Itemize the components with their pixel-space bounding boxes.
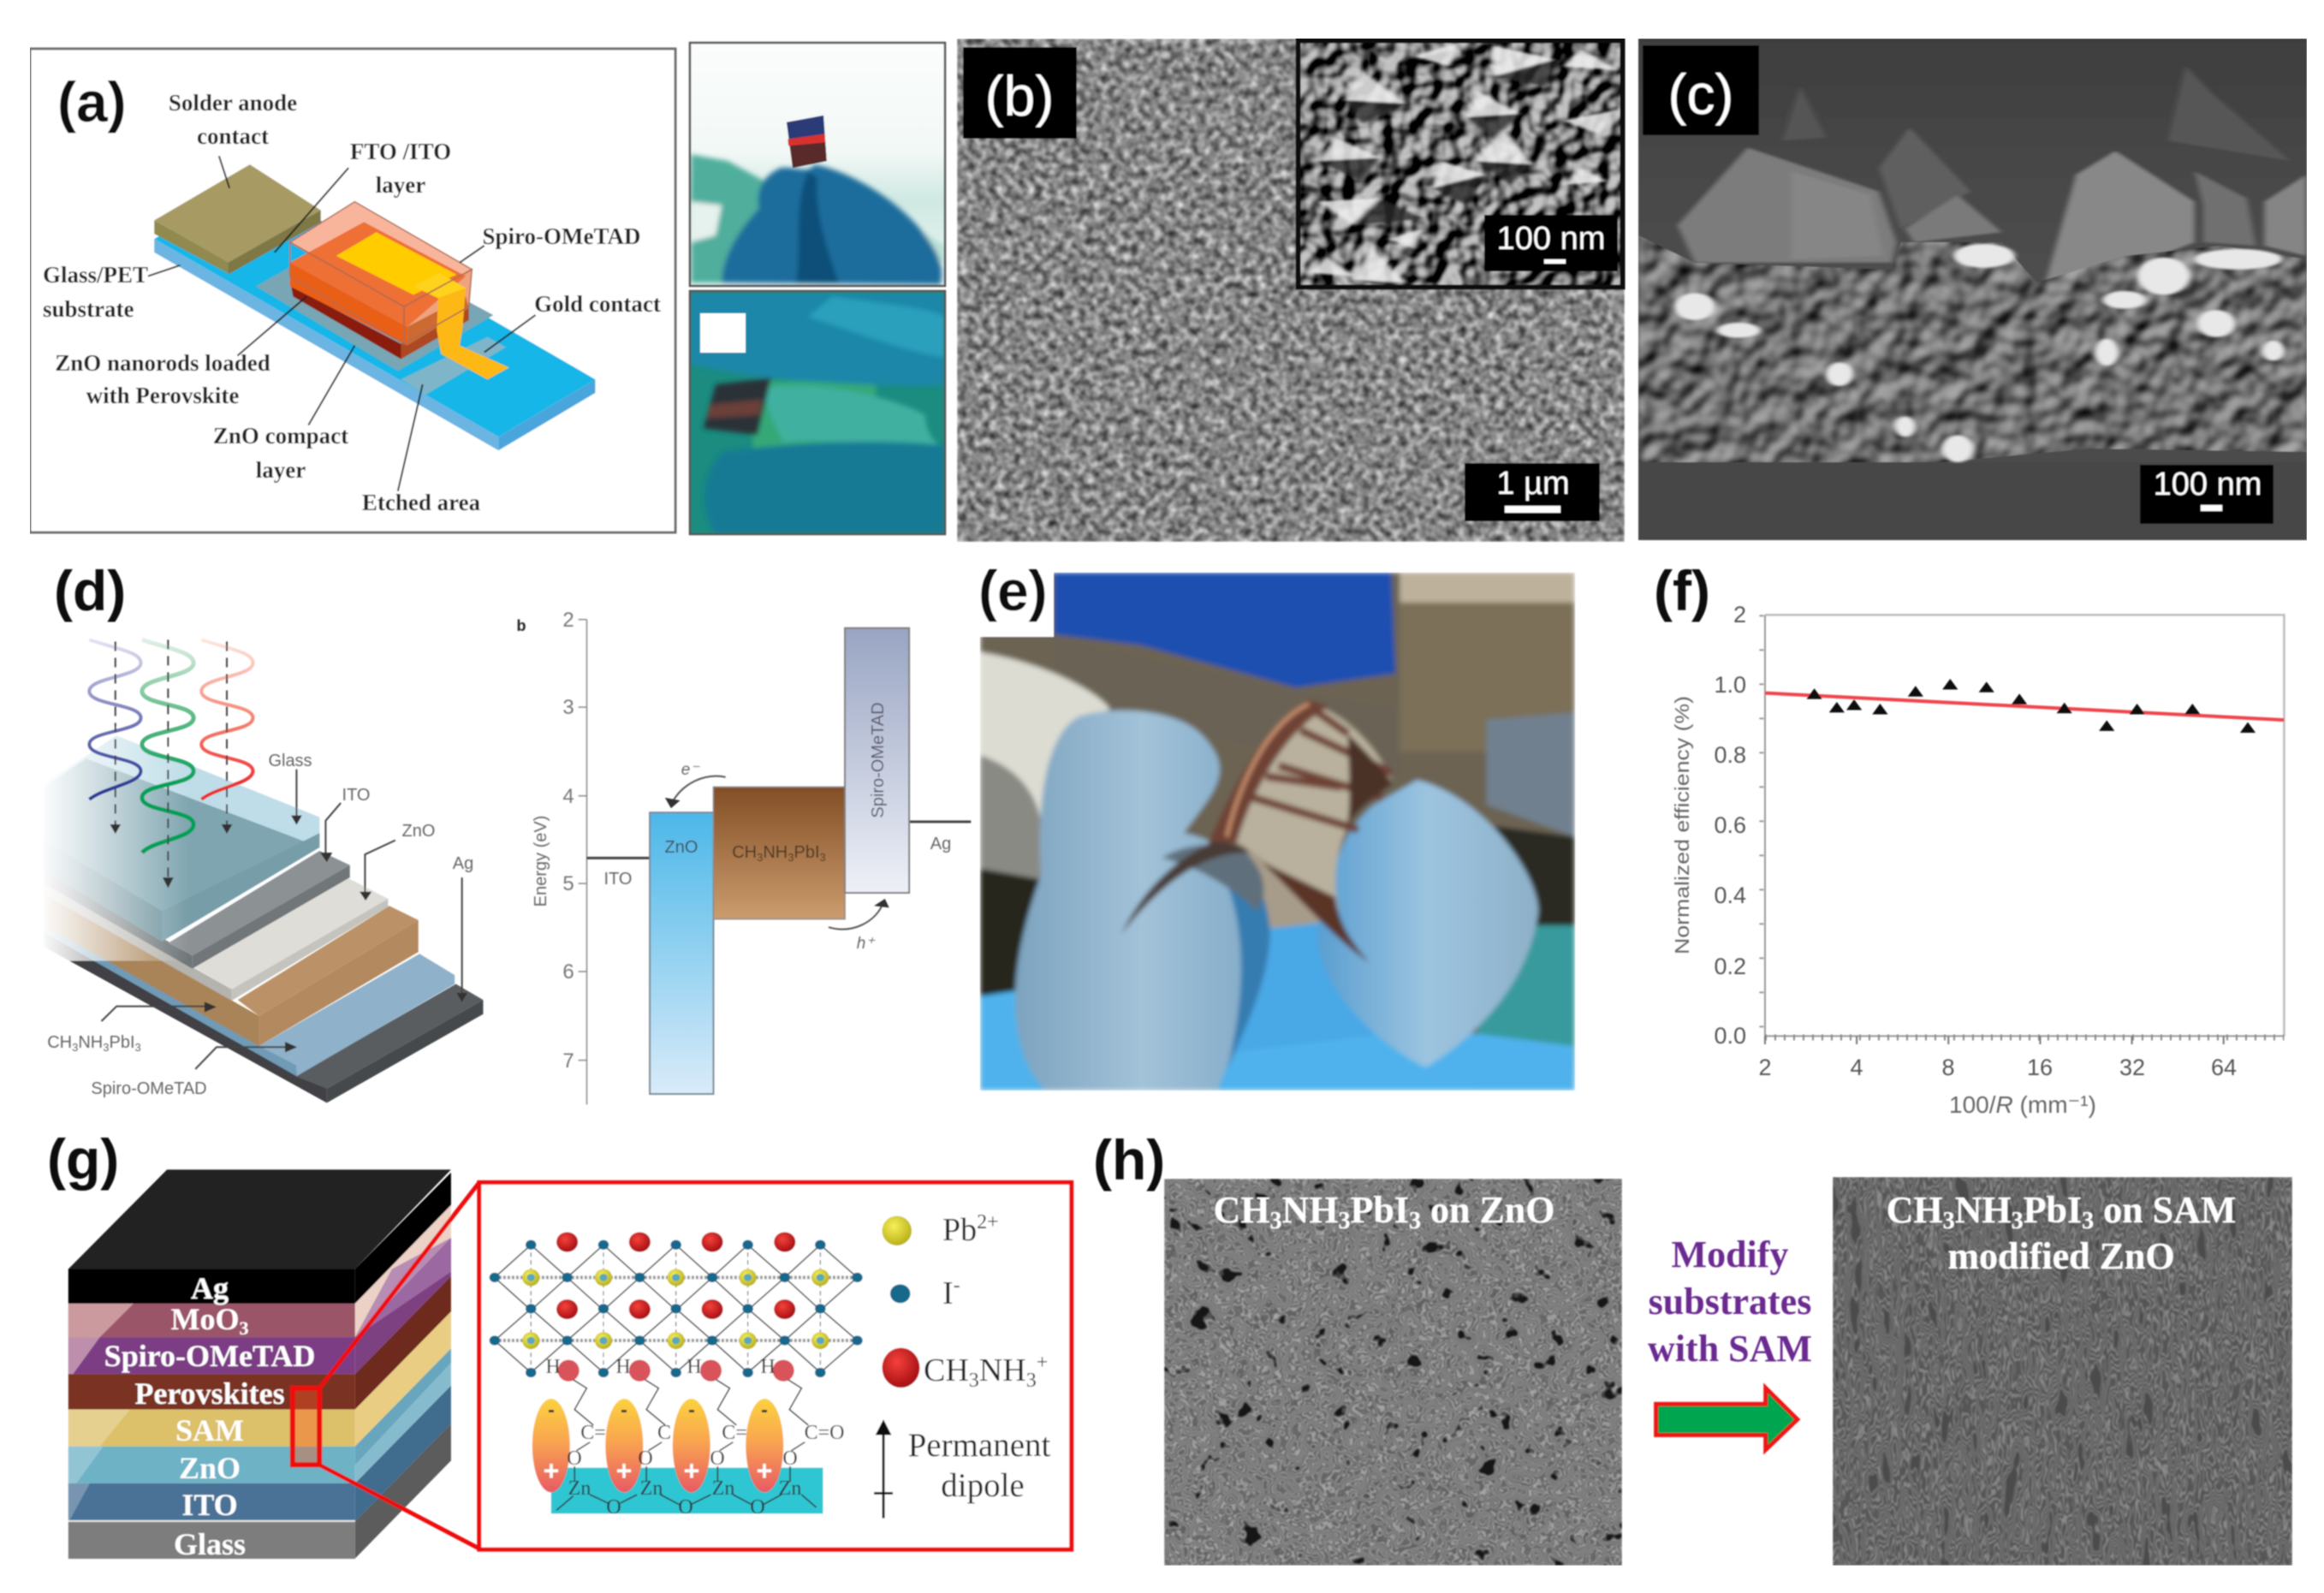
x-axis title: 100/R (mm⁻¹) [1949, 1091, 2096, 1118]
bright grains [1673, 244, 2285, 462]
scale bar 100 nm: 100 nm [1497, 221, 1605, 257]
layer label: Perovskites: Perovskites [134, 1376, 285, 1411]
caption: on ZnO: on ZnO [1421, 1189, 1554, 1231]
energy axis tick labels: 6 [562, 960, 574, 984]
y-axis tick labels: 0.8 [1714, 742, 1746, 768]
SEM: perovskite on ZnO [1164, 1179, 1622, 1566]
chain atoms: Zn [712, 1477, 734, 1500]
label: Spiro-OMeTAD: Spiro-OMeTAD [91, 1079, 207, 1098]
plot frame, ticks and data [1762, 615, 2284, 1044]
substrate [1638, 462, 2307, 540]
label: perovskite: 3 [820, 851, 826, 864]
y-axis tick labels: 0.6 [1714, 812, 1746, 838]
x-axis tick labels: 32 [2119, 1055, 2145, 1080]
x-axis tick labels [1758, 1055, 2237, 1080]
y-axis title: Normalized efficiency (%) [1671, 696, 1693, 954]
label: dipole: dipole [941, 1467, 1025, 1504]
dipole charges [544, 1399, 772, 1486]
dipole charges: - [688, 1399, 695, 1422]
legend: CH3NH3+: NH [979, 1352, 1026, 1388]
layer label: MoO3: 3 [239, 1317, 248, 1339]
label: Glass: Glass [268, 752, 312, 770]
legend: CH3NH3+: 3 [969, 1370, 979, 1392]
heading h: (h) [1093, 1128, 1165, 1192]
energy bars and axis [579, 620, 971, 1104]
label: perovskite: 3 [788, 851, 793, 864]
layer label: SAM: SAM [175, 1413, 244, 1447]
legend balls and dipole arrow [874, 1216, 919, 1519]
label: contact: contact [197, 123, 269, 149]
dipole charges: + [757, 1455, 772, 1486]
label: with Perovskite: with Perovskite [86, 383, 239, 408]
scale bar 1 µm [1465, 463, 1600, 521]
zoom callout with crystal structure [319, 1182, 1072, 1549]
legend: CH3NH3+: CH [924, 1352, 969, 1388]
label: CH3NH3PbI3: 3 [103, 1041, 109, 1054]
label: ZnO: ZnO [665, 838, 698, 857]
legend: I-: - [954, 1275, 960, 1297]
panel c: SEM cross-section [1638, 39, 2307, 540]
label: electron: e⁻ [681, 761, 700, 779]
caption: with SAM: with SAM [1648, 1328, 1812, 1370]
label: ZnO: ZnO [402, 822, 435, 841]
label: CH3NH3PbI3: CH [47, 1033, 72, 1052]
caption: on ZnO: CH [1214, 1189, 1270, 1231]
legend: Pb2+: Pb [942, 1212, 977, 1248]
dipole ovals [532, 1399, 783, 1492]
energy axis tick labels [562, 609, 574, 1073]
chain atoms: O [710, 1447, 725, 1470]
label: perovskite: NH [763, 843, 788, 862]
layer label: MoO3: MoO [171, 1302, 239, 1336]
panel d: device layer stack [35, 559, 483, 1103]
label: ITO: ITO [604, 870, 632, 889]
white mask behind letter [980, 573, 1054, 637]
mini device [787, 116, 827, 168]
label: Ag: Ag [453, 854, 473, 873]
dipole charges: - [621, 1399, 627, 1422]
chain atoms: O [606, 1496, 621, 1519]
chain atoms: O [782, 1447, 798, 1470]
label: ZnO compact: ZnO compact [213, 423, 348, 449]
label: perovskite: CH [732, 843, 757, 862]
label: glass/PET: Glass/PET [43, 262, 148, 288]
SAM chains and ZnO surface [551, 1380, 823, 1513]
label: ITO: ITO [342, 786, 370, 805]
inset SEM [1296, 39, 1625, 289]
energy level diagram [517, 609, 971, 1104]
chain atoms: Zn [568, 1477, 591, 1500]
chain atoms: H [545, 1356, 561, 1378]
energy axis tick labels: 3 [562, 696, 574, 719]
label: perovskite: 3 [757, 851, 763, 864]
device isometric drawing [148, 156, 595, 491]
caption: on SAM: NH [1955, 1189, 2012, 1231]
legend: Pb2+: 2+ [977, 1211, 999, 1233]
large crystals [1678, 66, 2307, 283]
y-axis tick labels: 0.0 [1714, 1023, 1746, 1049]
caption: on SAM: on SAM [2094, 1189, 2236, 1231]
chain atoms: Zn [640, 1477, 663, 1500]
label: CH3NH3PbI3: 3 [72, 1041, 78, 1054]
panel a: device schematic [30, 49, 675, 532]
caption: on ZnO: 3 [1409, 1208, 1421, 1234]
chain atoms: Zn [779, 1477, 801, 1500]
x-axis tick labels: 2 [1758, 1055, 1772, 1080]
energy axis tick labels: 4 [562, 785, 574, 808]
heading g: (g) [47, 1127, 119, 1191]
photo: rolled device in glove [690, 291, 945, 534]
dipole charges: - [761, 1399, 768, 1422]
y-axis tick labels: 0.4 [1714, 883, 1746, 908]
label: ZnO nanorods loaded: ZnO nanorods loaded [55, 350, 270, 376]
chain atoms: C [657, 1422, 671, 1444]
arrow: green with red outline [1656, 1388, 1798, 1450]
layer label: Ag: Ag [191, 1271, 229, 1305]
legend: CH3NH3+: 3 [1026, 1370, 1037, 1392]
label: Spiro-OMeTAD: Spiro-OMeTAD [869, 702, 888, 818]
y-axis tick labels: 1.0 [1714, 672, 1746, 698]
rough layer [1638, 231, 2307, 471]
label: CH3NH3PbI3: PbI [109, 1033, 135, 1052]
label: hole: h⁺ [857, 935, 876, 953]
caption: on SAM: CH [1887, 1189, 1943, 1231]
label: solder anode contact: Solder anode [169, 90, 297, 116]
y-axis tick labels: 2 [1733, 602, 1746, 627]
layer label: Glass: Glass [174, 1527, 246, 1561]
caption: modified ZnO: modified ZnO [1947, 1235, 2175, 1277]
caption: on ZnO: NH [1282, 1189, 1339, 1231]
SEM texture [957, 39, 1625, 542]
x-axis tick labels: 64 [2211, 1055, 2237, 1080]
caption: on SAM: 3 [2012, 1208, 2024, 1234]
panel h: SEM comparison [1093, 1128, 2292, 1566]
heading d: (d) [54, 559, 126, 622]
label: Ag: Ag [930, 835, 951, 853]
frame: top photo [690, 43, 945, 286]
crystal lattice [490, 1232, 863, 1382]
chain atoms: O [678, 1496, 693, 1519]
heading a: (a) [57, 70, 127, 134]
chain atoms: H [615, 1356, 631, 1378]
caption: on SAM: PbI [2024, 1189, 2082, 1231]
caption: substrates: substrates [1649, 1281, 1811, 1323]
scale bar 1 µm: 1 µm [1496, 466, 1570, 502]
scale bar 100 nm [1484, 215, 1618, 271]
caption: on SAM: 3 [1943, 1208, 1955, 1234]
x-axis tick labels: 16 [2027, 1055, 2053, 1080]
label: Permanent: Permanent [908, 1427, 1051, 1464]
energy axis tick labels: 2 [562, 609, 574, 632]
x-axis tick labels: 8 [1941, 1055, 1955, 1080]
dipole charges: + [616, 1455, 632, 1486]
panel g: SAM-modified device stack [47, 1127, 1072, 1561]
chain atoms: H [687, 1356, 702, 1378]
dipole charges: + [544, 1455, 559, 1486]
label: layer: layer [376, 172, 425, 198]
caption: on ZnO: 3 [1270, 1208, 1282, 1234]
label: perovskite: PbI [793, 843, 820, 862]
white mask square [700, 313, 746, 353]
layer stack [68, 1169, 451, 1559]
photo: device held in glove [690, 43, 945, 286]
dipole charges: + [684, 1455, 699, 1486]
caption: on ZnO: PbI [1351, 1189, 1409, 1231]
label: CH3NH3PbI3: 3 [135, 1041, 141, 1054]
caption: Modify: Modify [1672, 1233, 1788, 1275]
heading c [1643, 45, 1759, 135]
heading b [963, 47, 1077, 139]
scale bar 100 nm: 100 nm [2154, 467, 2262, 502]
heading e: (e) [978, 559, 1048, 622]
y-axis tick labels: 0.2 [1714, 954, 1746, 979]
label: layer: layer [256, 457, 306, 483]
chain atoms: H [760, 1356, 776, 1378]
layer label: ZnO: ZnO [179, 1451, 241, 1485]
legend: CH3NH3+: + [1037, 1352, 1048, 1374]
energy axis tick labels: 5 [562, 872, 574, 895]
dipole charges: - [548, 1399, 555, 1422]
label: substrate: substrate [43, 296, 134, 322]
x-axis tick labels: 4 [1850, 1055, 1863, 1080]
label: CH3NH3PbI3: NH [78, 1033, 103, 1052]
energy axis tick labels: 7 [562, 1049, 574, 1073]
label: Spiro-OMeTAD: Spiro-OMeTAD [483, 223, 640, 249]
scale bar 100 nm [2140, 465, 2273, 524]
chain atoms [545, 1356, 844, 1519]
panel e: photo of flexible device [978, 559, 1575, 1091]
chain atoms: O [638, 1447, 653, 1470]
energy axis title: Energy (eV) [532, 816, 550, 906]
legend: I-: I [942, 1275, 954, 1311]
isometric stack and light waves [35, 639, 483, 1103]
panel a frame [30, 49, 675, 532]
chain atoms: C=O [805, 1422, 844, 1444]
layer label: Spiro-OMeTAD: Spiro-OMeTAD [104, 1339, 315, 1373]
frame: bottom photo [690, 291, 945, 534]
label: etched area: Etched area [362, 490, 481, 515]
sub-figure letter b: b [517, 617, 526, 634]
photo scene [980, 573, 1575, 1091]
chain atoms: C= [580, 1422, 606, 1444]
chain atoms: O [567, 1447, 582, 1470]
label: FTO/ITO: FTO /ITO [350, 139, 451, 164]
layer label: ITO: ITO [181, 1488, 238, 1522]
chain atoms: O [750, 1496, 765, 1519]
panel b: SEM top view [957, 39, 1625, 542]
label: gold contact: Gold contact [534, 291, 661, 317]
caption: on SAM: 3 [2082, 1208, 2094, 1234]
caption: on ZnO: 3 [1339, 1208, 1351, 1234]
heading b: (b) [985, 64, 1054, 128]
heading f: (f) [1654, 559, 1710, 622]
SEM: perovskite on SAM-modified ZnO [1833, 1177, 2292, 1566]
heading c: (c) [1668, 62, 1733, 126]
chain atoms: C= [722, 1422, 747, 1444]
y-axis tick labels [1714, 602, 1746, 1049]
panel f: normalized efficiency chart [1654, 559, 2284, 1118]
